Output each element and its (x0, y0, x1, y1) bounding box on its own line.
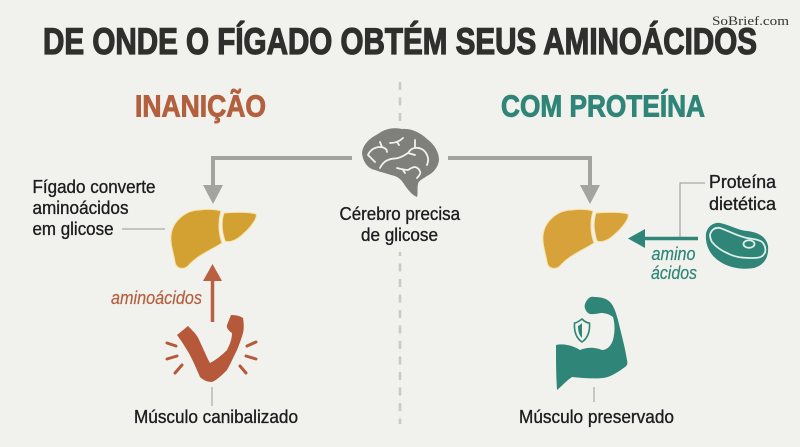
label: proteína dietética: dietética (709, 193, 777, 214)
icon: strong muscle with shield (556, 297, 627, 390)
icon: damaged arm (167, 315, 256, 382)
connector: proteína dietética (680, 183, 705, 238)
label: fígado converte aminoácidos em glicose: aminoácidos (32, 197, 128, 218)
icon: brain (362, 128, 439, 197)
label: cérebro precisa de glicose (340, 203, 461, 245)
arrow: brain to right liver (448, 158, 600, 204)
heading: inanição: INANIÇÃO (135, 88, 266, 124)
label: proteína dietética: Proteína (709, 171, 777, 192)
label: amino ácidos: ácidos (651, 263, 697, 283)
heading: com proteína: COM PROTEÍNA (501, 88, 705, 124)
label: cérebro precisa de glicose: Cérebro precisa (340, 203, 461, 224)
label: cérebro precisa de glicose: de glicose (361, 224, 438, 245)
watermark: SoBrief.com (712, 13, 789, 28)
icon: meat (706, 223, 768, 269)
arrow: amino acids to liver (628, 229, 698, 248)
label: músculo preservado: Músculo preservado (519, 406, 674, 427)
label: fígado converte aminoácidos em glicose: Fígado converte (32, 176, 156, 197)
label: fígado converte aminoácidos em glicose: em glicose (32, 218, 114, 239)
label: fígado converte aminoácidos em glicose (32, 176, 165, 239)
icon: liver left (171, 209, 256, 268)
label: amino ácidos (651, 244, 697, 283)
icon: liver right (543, 209, 628, 268)
label: amino ácidos: amino (652, 244, 696, 264)
arrow: up to liver (203, 264, 222, 322)
label: músculo canibalizado: Músculo canibalizado (134, 406, 298, 427)
label: proteína dietética (709, 171, 777, 214)
arrow: brain to left liver (203, 158, 352, 204)
label: aminoácidos: aminoácidos (111, 288, 202, 308)
